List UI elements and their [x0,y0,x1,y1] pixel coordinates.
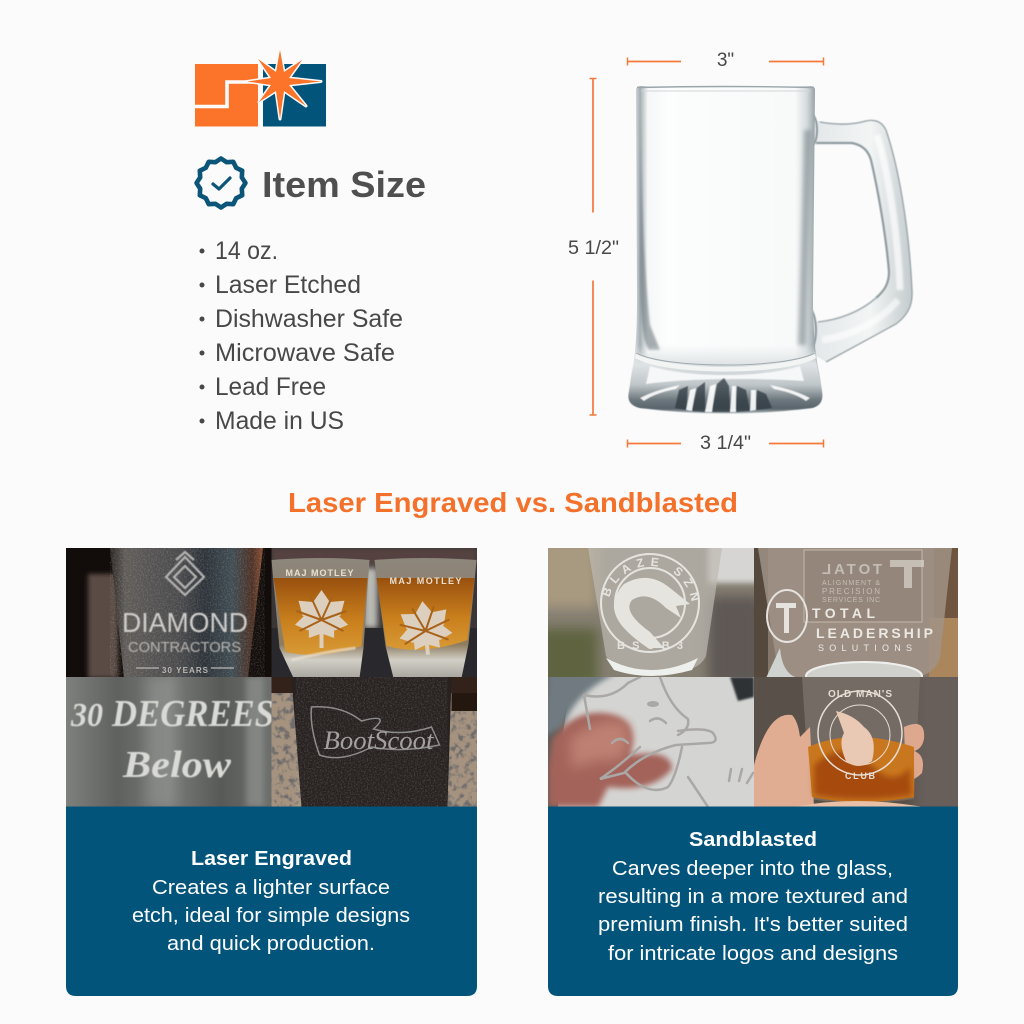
icon: verified badge [196,158,246,208]
dimension: top width 3 inches [628,50,824,71]
photo: total leadership glass: TOTAL [822,561,882,578]
mug wall shading [640,110,660,350]
mug handle [800,114,912,362]
panel: sandblasted [548,548,958,996]
caption: sandblasted: Sandblasted [689,828,817,851]
photo: total leadership glass [754,548,958,677]
mug body [628,86,822,414]
feature list: Lead Free [215,373,326,401]
photo: total leadership glass: SERVICES INC [822,597,880,604]
photo: boot scoot tumbler on granite [272,677,477,806]
mug illustration [628,86,912,414]
photo: old man's club glass in hand: CLUB [845,771,876,781]
caption: sandblasted: premium finish. It's better suited [598,913,908,936]
feature list: 14 oz. [215,237,278,265]
caption: sandblasted [598,828,908,965]
dimension: base width 3 1/4 inches: 3 1/4" [700,433,751,454]
photo: diamond contractors glass [66,548,272,677]
caption: laser engraved [132,847,410,955]
caption box [66,806,477,996]
photo: diamond contractors glass: 30 YEARS [162,666,209,675]
photo: diamond contractors glass: DIAMOND [122,607,248,638]
dimension: top width 3 inches: 3" [717,50,734,71]
dimension: height 5 1/2 inches [568,78,619,415]
caption: sandblasted: Carves deeper into the glass, [612,857,893,880]
photo: total leadership glass: ALIGNMENT & [822,580,880,587]
photo: total leadership glass: SOLUTIONS [818,643,912,653]
leaf etch right [394,598,457,658]
photo: cartoon etched glass [548,677,754,806]
feature list: Made in US [215,407,344,435]
caption: sandblasted: resulting in a more textured and [598,885,908,908]
feature list: Microwave Safe [215,339,395,367]
caption: laser engraved: Creates a lighter surface [152,876,390,899]
section heading: Laser Engraved vs. Sandblasted [288,487,738,518]
dimension: height 5 1/2 inches: 5 1/2" [568,238,619,259]
feature list [200,237,403,435]
photo: total leadership glass: TOTAL [812,605,875,621]
photo: blaze shot glass: BSUB3 [617,640,683,652]
caption: laser engraved: and quick production. [167,932,375,955]
photo: 30 degrees below glass [66,677,274,806]
caption: sandblasted: for intricate logos and designs [608,942,898,965]
caption box [548,806,958,996]
photo: diamond contractors glass: CONTRACTORS [128,639,241,656]
mug base [628,345,822,414]
photo: whisky shot glasses: MAJ MOTLEY [390,576,462,586]
photo: whisky shot glasses [272,548,477,677]
caption: laser engraved: Laser Engraved [191,847,352,870]
caption: laser engraved: etch, ideal for simple designs [132,904,410,927]
logo [195,50,326,126]
heading: item size: Item Size [262,164,426,205]
photo: 30 degrees below glass: Below [122,744,232,786]
photo: old man's club glass in hand: OLD MAN'S [828,689,892,700]
dimension: base width 3 1/4 inches [628,433,824,454]
photo: total leadership glass: LEADERSHIP [816,625,933,641]
photo: blaze shot glass: BLAZE SZN [602,558,698,601]
photo: whisky shot glasses: MAJ MOTLEY [286,568,354,578]
photo: 30 degrees below glass: 30 [70,697,103,734]
feature list: Laser Etched [215,271,361,299]
photo: boot scoot tumbler on granite: BootScoot [324,726,434,755]
panel: laser engraved [66,548,478,996]
leaf etch left [293,590,350,648]
photo: old man's club glass in hand [754,677,958,806]
feature list: Dishwasher Safe [215,305,403,333]
photo: total leadership glass: PRECISION [822,587,880,596]
photo: blaze shot glass [548,548,754,677]
